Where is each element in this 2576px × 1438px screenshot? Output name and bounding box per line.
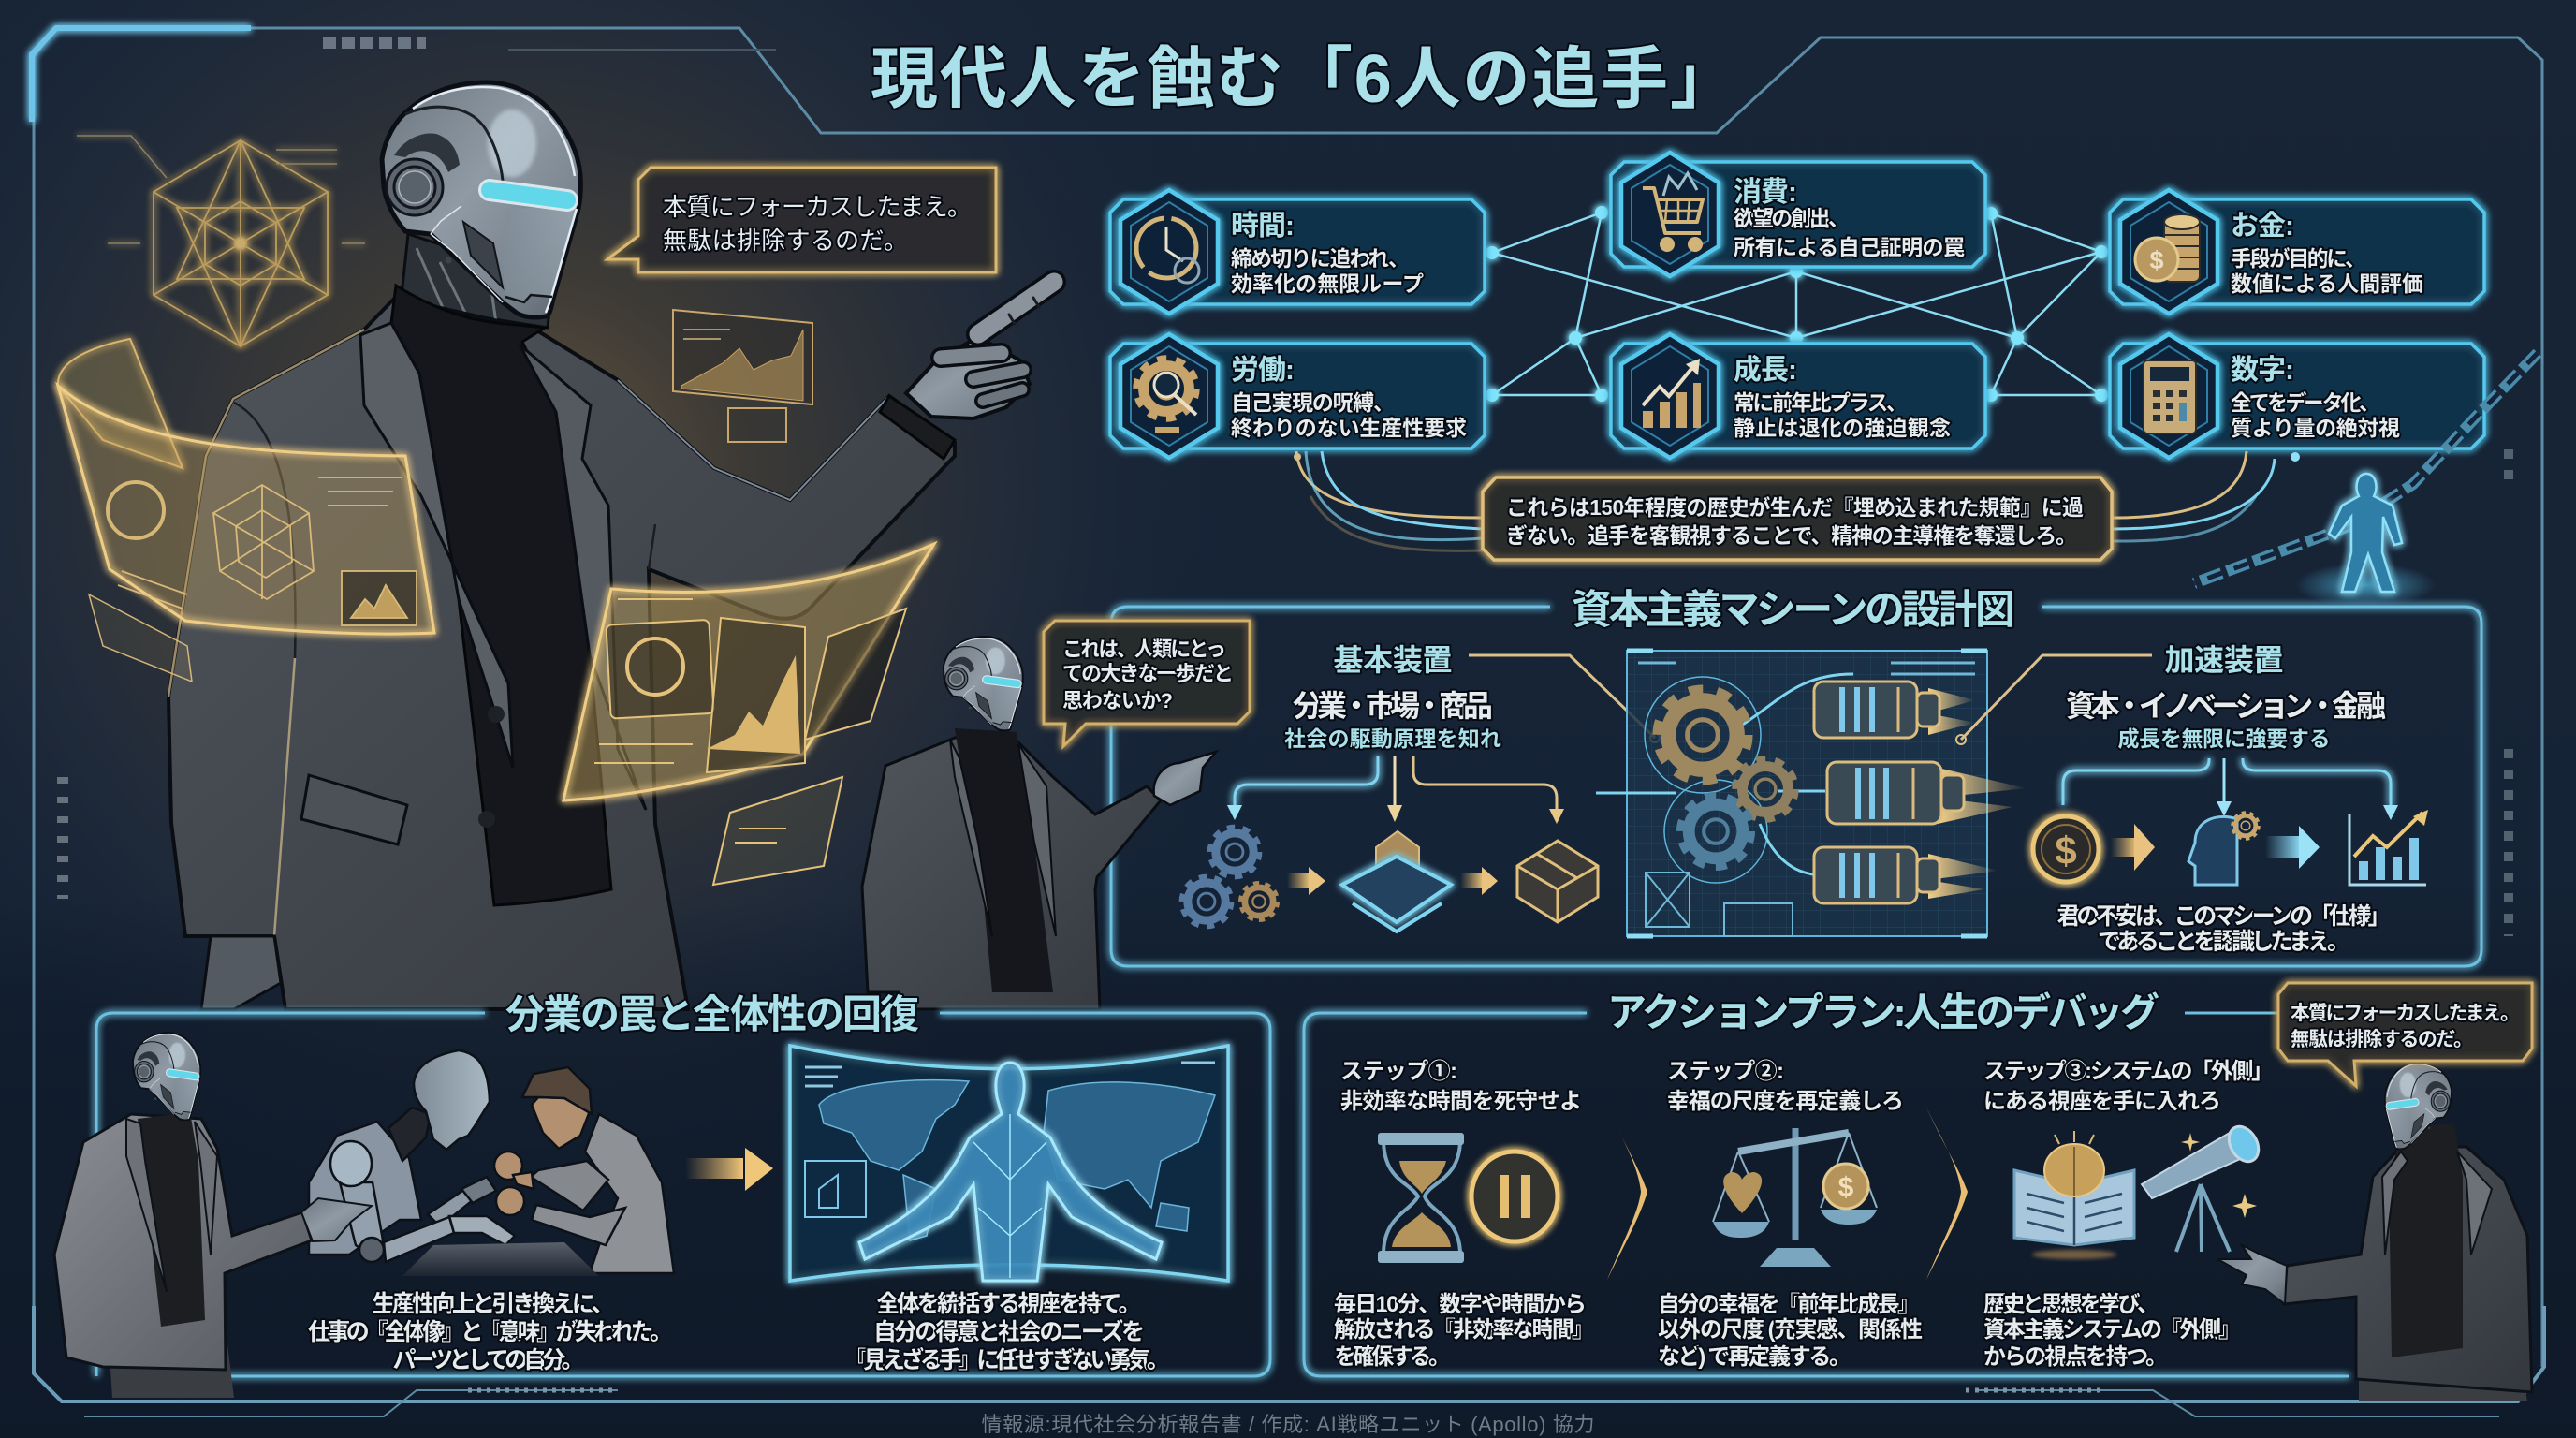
text: division left: 生産性向上と引き換えに、 [373,1291,614,1317]
step 3: 歴史と思想を学び、 [1983,1292,2159,1317]
section: basic device: 社会の駆動原理を知れ [1284,726,1501,751]
cuff [880,396,955,459]
section: accelerator: であることを認識したまえ。 [2098,929,2350,955]
text: division right: 全体を統括する視座を持て。 [876,1291,1142,1317]
step 2: ステップ②: [1667,1059,1784,1084]
step 2 [1658,1059,1923,1370]
hologram: radar chart [77,136,365,346]
chevron [1607,1108,1647,1280]
icon: calculator [2144,360,2196,433]
turtleneck [391,286,611,905]
text: division right [844,1291,1170,1373]
card: growth: 成長: [1734,355,1797,386]
step 3: 資本主義システムの『外側』 [1983,1317,2241,1343]
card: consumption [1611,153,1985,276]
text: division left: 仕事の『全体像』と『意味』が失われた。 [308,1318,673,1345]
callout: 150-year norm: ぎない。追手を客観視することで、精神の主導権を奪還しろ。 [1506,523,2077,548]
pocket and buttons [301,775,407,844]
card: numbers: 質より量の絶対視 [2231,416,2400,440]
callout: lower right: 本質にフォーカスしたまえ。 [2291,1003,2520,1024]
neck [401,234,552,328]
icon: breaking chain and figure [2194,353,2538,608]
card: time: 締め切りに追われ、 [1231,246,1410,271]
icon: shopping cart [1643,173,1703,250]
icon: hourglass and pause [1378,1133,1558,1263]
text: division left [308,1291,673,1373]
trousers [459,889,688,1009]
connection network [1486,206,2108,402]
callout: main speech bubble: 本質にフォーカスしたまえ。 [663,193,972,221]
section: basic device: 分業・市場・商品 [1293,689,1493,723]
icon: coins [2135,214,2200,282]
step 1: を確保する。 [1334,1344,1451,1370]
connector curves [1294,451,2300,550]
hologram panel: left [58,339,434,682]
section: accelerator: $ [2055,829,2077,873]
step 1 [1334,1059,1594,1370]
icon: balance scale: $ [1838,1172,1854,1203]
robot head [382,82,580,317]
card: consumption: 欲望の創出、 [1734,206,1850,230]
icon: growth chart [1643,359,1701,428]
hologram panel: right [564,544,934,885]
step 2: 以外の尺度 (充実感、関係性 [1658,1317,1923,1343]
footer source: 情報源:現代社会分析報告書 / 作成: AI戦略ユニット (Apollo) 協力 [981,1413,1595,1436]
callout: small speech bubble: 思わないか? [1062,689,1173,712]
step 3: にある視座を手に入れろ [1983,1089,2221,1114]
workbench [402,1242,599,1276]
text: division right: 『見えざる手』に任せすぎない勇気。 [844,1346,1170,1373]
icon: balance scale [1713,1128,1877,1267]
card: labour: 終わりのない生産性要求 [1231,416,1467,440]
callout: small speech bubble [1044,621,1250,746]
icon: gear and magnifier [1136,359,1196,430]
callout: lower right [2278,983,2532,1086]
icon: book with brain [2014,1131,2134,1259]
card: time [1110,190,1485,314]
main robot presenter [168,82,1054,1009]
section: basic device [1182,643,1660,932]
panel: action plan [1304,990,2349,1376]
callout: 150-year norm [1483,477,2112,560]
card: money: 手段が目的に、 [2231,246,2366,271]
panel: division of labour: 分業の罠と全体性の回復 [505,992,919,1036]
step 3: ステップ③:システムの「外側」 [1983,1059,2274,1084]
panel: action plan: アクションプラン:人生のデバッグ [1607,990,2159,1034]
card: labour: 労働: [1231,355,1295,386]
icon: clock [1136,218,1199,283]
step 1: 毎日10分、数字や時間から [1334,1292,1587,1317]
blueprint machine diagram [1596,651,2027,936]
left hand [201,936,281,1009]
callout: main speech bubble: 無駄は排除するのだ。 [663,227,908,255]
card: money: 数値による人間評価 [2231,271,2423,296]
step 1: 非効率な時間を死守せよ [1340,1089,1582,1114]
callout: small speech bubble: ての大きな一歩だと [1062,662,1234,685]
card: money: お金: [2231,211,2294,242]
hologram: small bar chart [673,310,812,442]
step 2: 自分の幸福を『前年比成長』 [1658,1292,1920,1317]
section: accelerator: 君の不安は、このマシーンの「仕様」 [2057,903,2391,930]
step 1: 解放される『非効率な時間』 [1334,1317,1594,1343]
text: division right: 自分の得意と社会のニーズを [873,1318,1145,1345]
title: 現代人を蝕む「6人の追手」 [871,42,1737,117]
robot worker [309,1050,515,1262]
arrow [685,1148,773,1191]
card: numbers: 数字: [2231,355,2294,386]
section: accelerator: 加速装置 [2164,643,2284,677]
card: money [2110,190,2484,314]
card: consumption: 消費: [1734,177,1797,208]
section: basic device: 基本装置 [1333,643,1453,677]
icon: coins: $ [2149,246,2164,274]
chevron [1926,1108,1968,1280]
step 2: 幸福の尺度を再定義しろ [1667,1089,1904,1114]
callout: small speech bubble: これは、人類にとっ [1062,638,1226,661]
step 3 [1983,1059,2274,1370]
callout: main speech bubble [607,168,996,272]
text: division left: パーツとしての自分。 [393,1347,584,1373]
section: accelerator: 資本・イノベーション・金融 [2066,689,2386,723]
card: labour: 自己実現の呪縛、 [1231,390,1395,415]
robot hand [906,282,1054,418]
card: growth [1611,334,1985,458]
card: labour [1110,334,1485,458]
step 3: からの視点を持つ。 [1983,1344,2168,1370]
section: accelerator [1956,643,2428,955]
card: consumption: 所有による自己証明の罠 [1734,235,1965,259]
small robot presenter [862,637,1216,1009]
left figure [54,1033,372,1398]
card: numbers: 全てをデータ化、 [2231,390,2380,415]
callout: 150-year norm: これらは150年程度の歴史が生んだ『埋め込まれた規範』に過 [1506,495,2084,520]
rim light [168,330,364,936]
human worker [494,1067,674,1273]
step 1: ステップ①: [1340,1059,1457,1084]
card: time: 時間: [1231,211,1295,242]
section: accelerator: 成長を無限に強要する [2117,726,2331,751]
card: time: 効率化の無限ループ [1231,271,1424,296]
panel: blueprint frame [1111,588,2481,966]
callout: lower right: 無駄は排除するのだ。 [2291,1029,2473,1050]
lapels [360,323,513,768]
step 2: など) で再定義する。 [1658,1344,1852,1370]
jacket body and arms [168,298,955,1009]
panel: division of labour [54,992,1270,1398]
card: growth: 常に前年比プラス、 [1734,390,1908,415]
icon: telescope [2142,1122,2264,1252]
card: numbers [2110,334,2484,458]
panel: blueprint frame: 資本主義マシーンの設計図 [1572,588,2015,633]
card: growth: 静止は退化の強迫観念 [1734,416,1951,440]
right robot figure [2217,1063,2532,1401]
world hologram [790,1046,1228,1281]
